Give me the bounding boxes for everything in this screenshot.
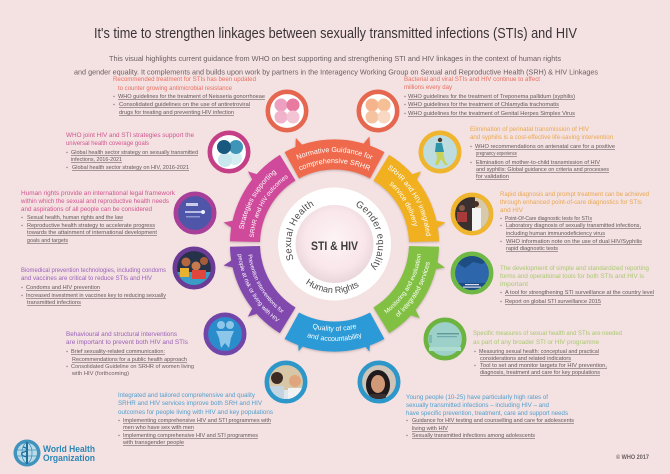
segment labels: Prevention interventions for xyxy=(248,254,284,313)
panel: rapid diagnosis: Point-Of-Care diagnostic tests for STIs xyxy=(505,216,592,222)
panel: human rights: goals and targets xyxy=(27,238,68,244)
central wheel xyxy=(224,136,446,354)
panel: standardized reporting: important xyxy=(500,281,528,288)
panel: elimination of perinatal transmission: and syphilis: Global guidance on criteria and processes xyxy=(476,167,609,173)
segment labels xyxy=(236,147,432,342)
icon: monitoring document xyxy=(426,320,464,358)
panel: rapid diagnosis: WHO information note on the use of dual HIV/Syphilis xyxy=(506,239,642,245)
logo: World Health Organization xyxy=(14,440,95,466)
copyright: © WHO 2017 xyxy=(616,454,650,461)
panel: recommended treatment: drugs for treating and preventing HIV infection xyxy=(119,110,234,116)
centre disc xyxy=(296,205,374,283)
segment: strategies supporting xyxy=(219,148,303,254)
panel: bacterial and viral STIs: WHO guidelines for the treatment of Genital Herpes Simplex Virus xyxy=(408,111,575,117)
panel: joint strategies: infections, 2016-2021 xyxy=(71,157,122,163)
panel: young people: have specific prevention, treatment, care and support needs xyxy=(406,410,568,417)
icon: surveillance map xyxy=(453,254,491,292)
logo wordmark xyxy=(43,444,95,464)
panel: young people: Sexually transmitted infections among adolescents xyxy=(412,433,535,439)
panel: recommended treatment: WHO guidelines for the treatment of Neisseria gonorrhoeae xyxy=(118,94,265,100)
panel: young people: Guidance for HIV testing and counselling and care for adolescents xyxy=(412,418,574,424)
icon: walking figure xyxy=(421,133,459,171)
segment: quality of care xyxy=(285,312,384,353)
segment labels: and accountability xyxy=(307,333,362,342)
segment labels: Quality of care xyxy=(312,324,356,332)
panel: standardized reporting: The development of simple and standardized reporting xyxy=(500,265,649,272)
panel: integrated services: with transgender people xyxy=(122,440,184,446)
panel: rapid diagnosis: Rapid diagnosis and prompt treatment can be achieved xyxy=(500,191,649,198)
icon: photo of clinic xyxy=(453,195,491,233)
panel: standardized reporting: Report on global STI surveillance 2015 xyxy=(505,299,601,305)
icon: pink cells xyxy=(268,92,306,130)
panel: joint strategies xyxy=(66,132,198,171)
segment: prevention interventions xyxy=(219,234,303,340)
panel: behavioural interventions xyxy=(66,331,194,377)
intro text xyxy=(74,54,598,76)
panel: young people xyxy=(406,394,574,439)
panel: recommended treatment: Recommended treatment for STIs has been updated xyxy=(113,76,256,83)
segment: service delivery xyxy=(366,148,450,254)
panel: behavioural interventions: Behavioural and structural interventions xyxy=(66,331,177,338)
panel: biomedical prevention: transmitted infections xyxy=(27,300,81,306)
panel: human rights: Reproductive health strategy to accelerate progress xyxy=(27,223,155,229)
icon: strategy cover xyxy=(176,194,214,232)
panel: specific measures: Specific measures of sexual health and STIs are needed xyxy=(473,330,622,337)
icon: photo of crowd xyxy=(175,249,213,287)
panel: behavioural interventions: with HIV (forthcoming) xyxy=(71,371,129,377)
panel: rapid diagnosis xyxy=(500,191,649,252)
panel: specific measures xyxy=(473,330,622,376)
panel: human rights xyxy=(20,190,176,244)
panel: standardized reporting: forms and operational tools for both STIs and HIV is xyxy=(500,273,644,280)
panel: integrated services: Implementing comprehensive HIV and STI programmes xyxy=(123,433,258,439)
segment: normative guidance xyxy=(285,135,384,178)
panel: recommended treatment: to counter growing antimicrobial resistance xyxy=(118,85,232,92)
segment labels: service delivery xyxy=(390,182,418,226)
panel: behavioural interventions: Consolidated Guideline on SRHR of women living xyxy=(71,364,194,370)
icon: peach cells xyxy=(359,92,397,130)
panel: integrated services: outcomes for people living with HIV and key populations xyxy=(118,409,273,416)
segment labels: Strategies supporting xyxy=(239,170,276,230)
segment labels: Normative Guidance for xyxy=(296,147,373,160)
panel: biomedical prevention xyxy=(21,267,166,306)
panel: behavioural interventions: Recommendations for a public health approach xyxy=(72,357,187,363)
panel: joint strategies: WHO joint HIV and STI strategies support the xyxy=(66,132,194,139)
panel: elimination of perinatal transmission xyxy=(470,126,615,180)
panel: human rights: towards the attainment of international development xyxy=(27,230,158,236)
panel: bacterial and viral STIs: millions every day xyxy=(404,84,453,91)
panel: elimination of perinatal transmission: pregnancy experience xyxy=(476,151,517,157)
panel: specific measures: as part of any broader STI or HIV programme xyxy=(473,339,599,346)
panel: standardized reporting: A tool for strengthening STI surveillance at the country level xyxy=(505,290,654,296)
panel: specific measures: Tool to set and monitor targets for HIV prevention, xyxy=(480,363,608,369)
ring labels: Gender equality xyxy=(356,201,384,270)
panel: elimination of perinatal transmission: Elimination of perinatal transmission of HIV xyxy=(470,126,590,133)
panel: standardized reporting xyxy=(500,265,654,305)
icon: people silhouettes xyxy=(206,315,244,353)
panel: biomedical prevention: Increased investment in vaccines key to reducing sexually xyxy=(26,293,166,299)
panel: human rights: Sexual health, human rights and the law xyxy=(27,215,123,221)
panel: specific measures: Measuring sexual health: conceptual and practical xyxy=(479,349,599,355)
icon: WHO emblem xyxy=(14,440,40,466)
panel: recommended treatment xyxy=(113,76,265,116)
panel: elimination of perinatal transmission: Elimination of mother-to-child transmission of HIV xyxy=(476,160,600,166)
panel: bacterial and viral STIs: WHO guidelines for the treatment of Treponema pallidum (syphilis) xyxy=(408,94,575,100)
white ring xyxy=(278,188,391,300)
panel: biomedical prevention: Condoms and HIV prevention xyxy=(26,285,100,291)
panel: integrated services: men who have sex with men xyxy=(123,425,194,431)
panel: elimination of perinatal transmission: for validation xyxy=(476,174,509,180)
segment labels: SRHR and HIV outcomes xyxy=(250,175,288,238)
panel: joint strategies: Global health sector strategy on sexually transmitted xyxy=(71,150,198,156)
panel: behavioural interventions: Brief sexuality-related communication: xyxy=(71,349,165,355)
panel: young people: living with HIV xyxy=(412,426,448,432)
panel: integrated services xyxy=(118,392,273,446)
panel: rapid diagnosis: through enhanced point-of-care diagnostics for STIs xyxy=(500,199,642,206)
ring labels: Human Rights xyxy=(306,278,359,294)
panel: human rights: within which the sexual and reproductive health needs xyxy=(20,198,169,205)
icon: photo of two men xyxy=(267,363,305,401)
panel: biomedical prevention: Biomedical prevention technologies, including condoms xyxy=(21,267,166,274)
panel: rapid diagnosis: Laboratory diagnosis of sexually transmitted infections, xyxy=(506,223,642,229)
ring labels: Sexual Health xyxy=(286,201,314,260)
panel: specific measures: diagnosis, treatment and care for key populations xyxy=(480,370,600,376)
panel: human rights: Human rights provide an international legal framework xyxy=(21,190,176,197)
panel: integrated services: Integrated and tailored comprehensive and quality xyxy=(118,392,256,399)
segment labels: SRHR and HIV integrated xyxy=(388,165,432,236)
panel: bacterial and viral STIs: Bacterial and viral STIs and HIV continue to affect xyxy=(404,76,540,83)
panel: biomedical prevention: and vaccines are critical to reduce STIs and HIV xyxy=(21,275,153,282)
panel: young people: sexually transmitted infections – including HIV – and xyxy=(406,402,549,409)
centre label: STI & HIV xyxy=(311,241,358,253)
panel: bacterial and viral STIs xyxy=(404,76,575,117)
panel: joint strategies: universal health coverage goals xyxy=(66,140,149,147)
icon: overlapping circles xyxy=(210,133,248,171)
panel: behavioural interventions: are important to prevent both HIV and STIs xyxy=(66,339,188,346)
panel: bacterial and viral STIs: WHO guidelines for the treatment of Chlamydia trachomatis xyxy=(408,102,559,108)
panel: rapid diagnosis: rapid diagnostic tests xyxy=(506,246,558,252)
panel: recommended treatment: Consolidated guidelines on the use of antiretroviral xyxy=(119,102,250,108)
panel: integrated services: Implementing comprehensive HIV and STI programmes with xyxy=(123,418,271,424)
panel: integrated services: SRHR and HIV services improve both SRH and HIV xyxy=(118,400,263,407)
panel: rapid diagnosis: and HIV xyxy=(500,207,524,214)
panel: rapid diagnosis: including human immunodeficiency virus xyxy=(506,231,605,237)
segment labels: people at risk or living with HIV xyxy=(236,254,280,322)
panel: elimination of perinatal transmission: and syphilis is a cost-effective life-saving intervention xyxy=(470,134,613,141)
segment: monitoring and evaluation xyxy=(366,234,450,340)
panel: human rights: and aspirations of all people can be considered xyxy=(21,206,152,213)
intro text: and gender equality. It complements and builds upon work by partners in the Interagency Working Group on Sexual and Reproductive Health (SRH) & HIV Linkages xyxy=(74,68,598,76)
segment labels: comprehensive SRHR xyxy=(299,158,370,170)
segment labels: Monitoring and evaluation xyxy=(384,254,421,314)
segment labels: of integrated services xyxy=(396,262,430,317)
panel: young people: Young people (10-25) have particularly high rates of xyxy=(406,394,548,401)
panel: joint strategies: Global health sector strategy on HIV, 2016-2021 xyxy=(72,165,189,171)
logo wordmark: World Health xyxy=(43,444,95,455)
panel: specific measures: considerations and related indicators xyxy=(480,356,571,362)
intro text: This visual highlights current guidance from WHO on best supporting and strengthening STI and HIV linkages in the context of human rights xyxy=(109,54,561,63)
title: It's time to strengthen linkages between sexually transmitted infections (STIs) and HIV xyxy=(94,25,577,42)
ring labels xyxy=(286,201,384,294)
logo wordmark: Organization xyxy=(43,453,95,464)
panel: elimination of perinatal transmission: WHO recommendations on antenatal care for a positive xyxy=(475,144,615,150)
icon: photo of young woman xyxy=(360,363,398,401)
